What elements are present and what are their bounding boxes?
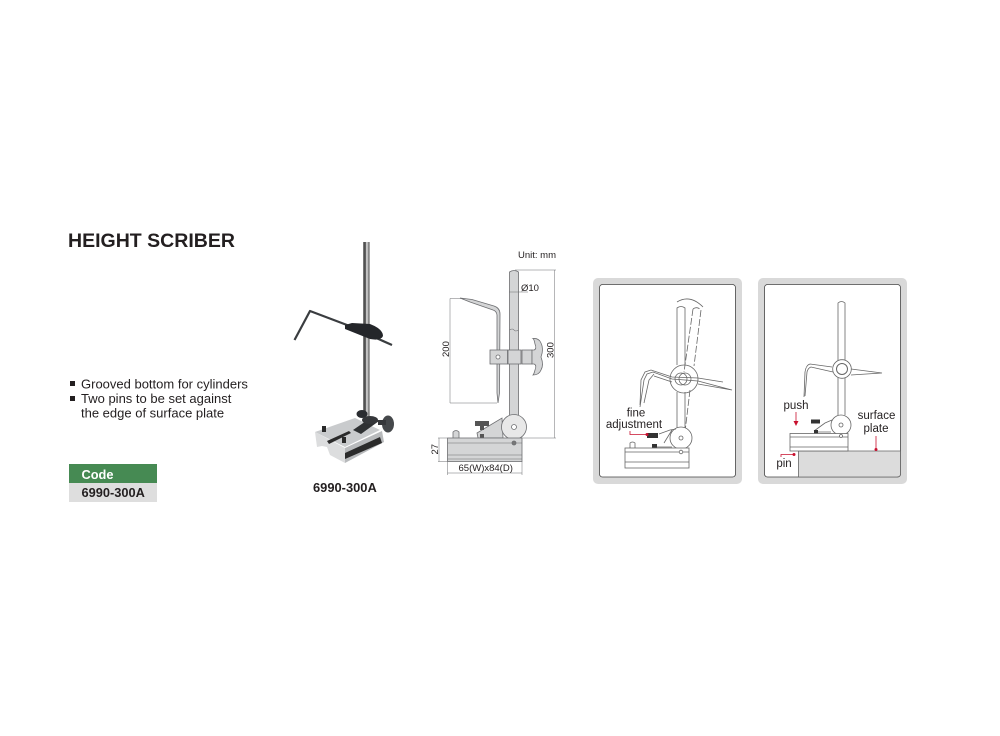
pin pointer <box>781 454 794 457</box>
upright rod <box>677 306 685 432</box>
base lines <box>448 443 522 459</box>
label: surface: surface <box>858 410 895 422</box>
feature list <box>70 376 248 420</box>
clamp outer <box>833 360 851 378</box>
title: HEIGHT SCRIBER <box>68 231 235 252</box>
wheel <box>502 414 526 440</box>
dimension drawing <box>430 250 556 475</box>
code table: Code <box>82 467 114 482</box>
clamp hole <box>496 355 500 359</box>
red pointer dot <box>646 433 648 436</box>
clamp inner <box>836 364 848 374</box>
rod <box>363 242 370 417</box>
base block top <box>315 418 380 447</box>
scriber needle <box>460 298 500 403</box>
clamp handle <box>345 323 383 340</box>
panel: fine adjustment <box>593 278 742 484</box>
fine adjustment lever <box>477 418 503 438</box>
pin one <box>322 426 326 432</box>
arm hub <box>362 416 378 424</box>
diameter leader <box>509 291 528 293</box>
lever <box>654 429 676 447</box>
thumb screw stem <box>480 426 484 430</box>
photo caption: 6990-300A <box>313 480 377 495</box>
scriber needle <box>294 311 392 345</box>
clamp inner <box>679 373 691 385</box>
feature list: Two pins to be set against <box>81 391 232 406</box>
base screw <box>679 450 683 454</box>
200 dimension lines <box>450 298 497 403</box>
feature list: the edge of surface plate <box>81 406 224 420</box>
wheel hub <box>839 423 843 427</box>
panel inner <box>764 284 900 477</box>
27 label: 27 <box>430 444 441 454</box>
width depth label: 65(W)x84(D) <box>458 463 513 474</box>
push arrow <box>795 412 797 423</box>
thumb screw head <box>475 421 489 426</box>
clamp knob <box>532 338 542 375</box>
base screw <box>840 434 842 438</box>
clamp second <box>675 373 687 385</box>
base <box>625 448 689 468</box>
clamp neck <box>522 350 532 364</box>
groove <box>345 437 382 459</box>
panel frame <box>593 278 742 484</box>
fine adjustment arm <box>353 417 379 434</box>
swing arc <box>677 299 703 307</box>
scriber <box>804 364 882 397</box>
label: push: push <box>784 400 808 412</box>
width depth dimension lines <box>448 462 522 475</box>
base block side <box>345 431 384 463</box>
push arrowhead <box>794 421 798 426</box>
knob stem <box>378 420 386 425</box>
200 label: 200 <box>441 341 452 357</box>
panel inner <box>600 284 736 477</box>
diameter label: Ø10 <box>521 283 539 294</box>
feature list: Grooved bottom for cylinders <box>81 376 248 392</box>
break line <box>510 329 518 331</box>
screw foot <box>652 444 657 448</box>
surface plate pointer <box>875 436 877 449</box>
rod <box>838 302 845 415</box>
wheel hub <box>512 424 516 430</box>
base lines <box>625 452 689 462</box>
pin <box>630 442 635 448</box>
arm head <box>356 410 368 418</box>
code table: 6990-300A <box>82 485 145 500</box>
clamp center <box>508 350 521 364</box>
panel: push and surface plate <box>758 278 907 484</box>
unit label: Unit: mm <box>518 250 556 261</box>
screw head <box>647 433 658 438</box>
label: pin: pin <box>776 458 792 470</box>
base <box>790 434 848 451</box>
base <box>448 438 522 462</box>
wheel <box>670 427 692 449</box>
300 label: 300 <box>546 342 556 358</box>
wheel hub <box>679 436 683 440</box>
red pointer <box>630 431 647 434</box>
wheel <box>831 415 851 435</box>
300 dimension lines <box>515 270 556 438</box>
pin pointer dot <box>792 453 796 456</box>
pin <box>453 430 459 438</box>
code table <box>69 464 157 502</box>
tilted rod <box>684 308 701 432</box>
knob <box>382 416 394 432</box>
label: adjustment: adjustment <box>606 419 663 431</box>
pin two <box>342 437 346 443</box>
panel frame <box>758 278 907 484</box>
surface plate pointer dot <box>874 448 878 451</box>
label: plate: plate <box>864 423 888 435</box>
surface plate <box>798 451 900 477</box>
clamp block <box>490 350 508 364</box>
column <box>510 270 518 415</box>
label: fine: fine <box>627 408 645 420</box>
screw foot <box>814 430 818 434</box>
base lines <box>790 437 848 447</box>
lever <box>814 420 832 432</box>
base slot <box>327 431 351 444</box>
screw head <box>811 420 820 424</box>
base screw <box>512 441 516 445</box>
scriber arms <box>640 370 732 407</box>
product photo: height scriber <box>294 242 394 463</box>
thumb screw foot <box>480 434 484 438</box>
27 dimension lines <box>438 438 447 462</box>
base block front <box>315 432 345 463</box>
clamp outer <box>670 365 698 393</box>
